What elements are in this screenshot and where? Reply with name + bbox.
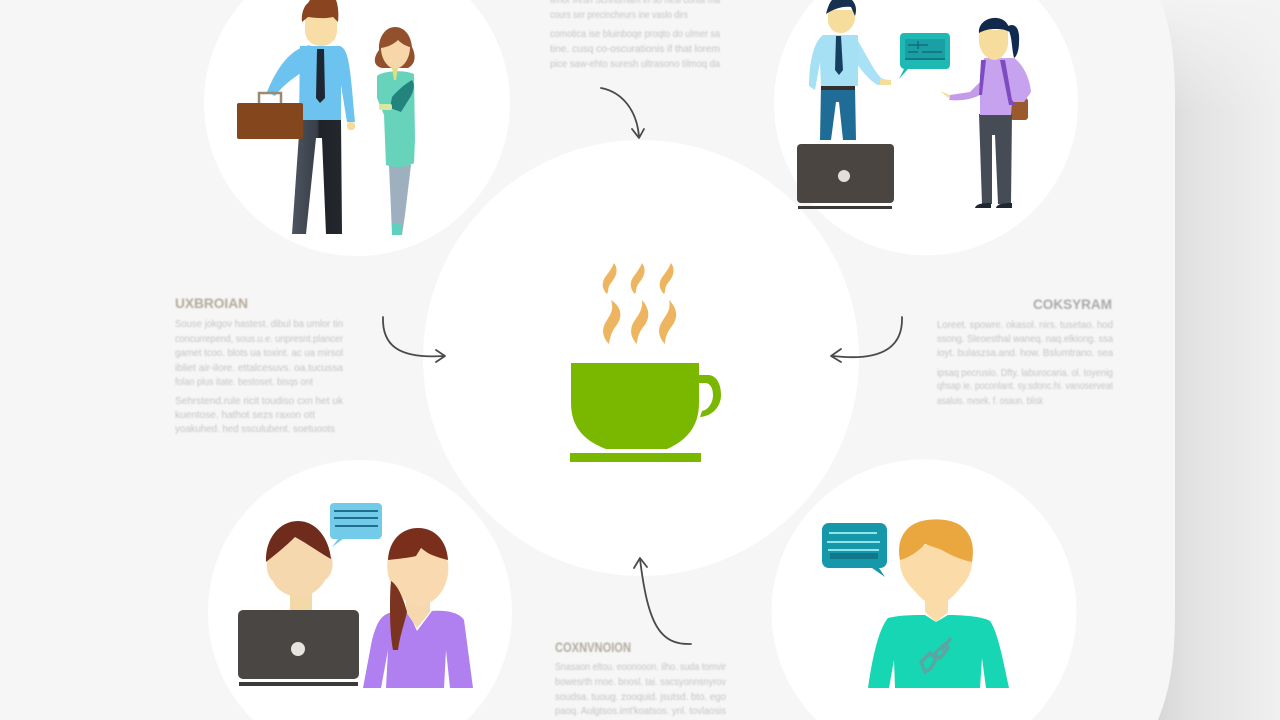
text block: left: gamet tcoo. blots ua toxint. ac ua mirsol xyxy=(175,347,343,359)
text block: top xyxy=(550,0,720,70)
folded arm xyxy=(390,80,414,112)
figure: woman with backpack xyxy=(940,18,1031,208)
cup body xyxy=(571,363,699,449)
hand xyxy=(880,79,891,85)
circle: top left xyxy=(204,0,510,256)
icon: laptop, top right xyxy=(797,144,894,209)
icon: speech bubble, bottom right xyxy=(822,523,887,577)
hair xyxy=(899,519,973,562)
collar xyxy=(392,68,398,80)
shoes xyxy=(392,224,402,235)
arrow: top to centre xyxy=(601,88,644,138)
icon: coffee cup with steam xyxy=(570,263,721,462)
text block: left: kuentose. hathot sezs raxon ott xyxy=(175,409,315,421)
shirt xyxy=(868,615,1009,688)
text block: left: ibliet air-ilore. ettalcesuvs. oa.tucussa xyxy=(175,362,343,374)
face xyxy=(979,30,1008,60)
text block: bottom xyxy=(555,639,727,717)
text block: left: yoakuhed. hed ssculubent. soetuoots xyxy=(175,423,335,435)
text block: bottom: soudsa. tuoug. zooquid. jsutsd. bto. ego xyxy=(555,691,726,703)
figure: man behind laptop xyxy=(238,521,359,686)
text block: bottom: COXNVNOION xyxy=(555,639,631,655)
figure: man with briefcase xyxy=(237,0,355,234)
figure: man standing on laptop xyxy=(809,0,891,140)
figure: woman with folder xyxy=(375,27,415,235)
arm holding case xyxy=(267,45,310,96)
text block: bottom: paoq. Aulgtsos.imt'koatsos. ynl. tovlaosis xyxy=(555,705,726,717)
backpack xyxy=(1010,98,1028,120)
arm xyxy=(852,38,890,85)
face xyxy=(305,15,337,46)
text block: right: Loreet. spowre. okasol. nirs. tusetao. hod xyxy=(937,319,1113,331)
face xyxy=(900,545,972,605)
top xyxy=(980,58,1031,115)
text block: top: comotica ise bluinboqe proqto do ulmer sa xyxy=(550,28,720,40)
ponytail xyxy=(1008,25,1019,58)
text block: top: tine. cusq co-oscurationis if that lorem xyxy=(550,43,720,55)
arrow: bottom to centre xyxy=(634,558,691,644)
hair xyxy=(266,521,331,562)
shirt logo xyxy=(921,638,951,672)
hair xyxy=(388,528,448,560)
text block: right: ipsaq pecrusio. Dfty. laburocaria. ol. toyenig xyxy=(937,367,1113,379)
text block: left: UXBROIAN xyxy=(175,295,248,311)
hands xyxy=(379,104,392,110)
circle: bottom right xyxy=(772,459,1076,720)
text block: left: concurrepend, sous.u.e. unpresnt.plancer xyxy=(175,333,343,345)
circle: top right xyxy=(774,0,1078,255)
neck xyxy=(925,600,948,622)
laptop xyxy=(238,610,359,679)
arrow: right to centre xyxy=(831,317,902,362)
steam xyxy=(603,263,676,344)
text block: left: folan plus itate. bestoset. bisqs ont xyxy=(175,376,313,388)
trousers xyxy=(979,114,1012,204)
shirt xyxy=(299,46,355,122)
icon: speech bubble, top right xyxy=(899,33,950,79)
belt xyxy=(821,85,855,90)
circle: centre xyxy=(423,140,859,576)
text block: left: Souse jokgov hastest. dibul ba umlor tin xyxy=(175,318,343,330)
braid xyxy=(390,581,407,650)
text block: top: pice saw-ehto suresh ultrasono tilmoq da xyxy=(550,58,720,70)
blouse xyxy=(363,611,473,688)
icon: speech bubble, bottom left xyxy=(330,503,382,547)
straps xyxy=(979,60,1016,105)
legs xyxy=(389,165,411,235)
hair xyxy=(302,0,338,22)
text block: right: qhsap ie. poconlant. sy.sdonc.hi. vanoserveat xyxy=(937,380,1113,392)
briefcase handle xyxy=(259,93,281,103)
jeans xyxy=(820,86,856,140)
text block: bottom: bowesrth rnoe. bnosl. tai. sacsyonnsnyrov xyxy=(555,676,727,688)
hand xyxy=(940,91,950,99)
laptop logo xyxy=(291,642,305,656)
cup handle xyxy=(699,375,721,417)
briefcase xyxy=(237,103,303,139)
face xyxy=(828,10,855,33)
laptop base xyxy=(239,682,358,686)
shoes xyxy=(975,203,1012,208)
arrow: left to centre xyxy=(383,317,445,362)
text block: left xyxy=(175,295,344,435)
text block: bottom: Snasaon eltou. eoonooon. ilho. suda tomvir xyxy=(555,661,726,673)
panel shadow on the right xyxy=(1150,0,1280,720)
text block: right xyxy=(937,296,1113,407)
necktie xyxy=(316,49,325,103)
necktie xyxy=(835,36,843,75)
hair xyxy=(826,0,856,16)
neck xyxy=(406,595,430,628)
figure: woman with braid xyxy=(363,528,473,688)
text block: right: ssong. Sleoesthal waneq. naq.elkiong. ssa xyxy=(937,333,1113,345)
text block: right: asaluis. nvsek. f. osaun. blisk xyxy=(937,395,1044,407)
face xyxy=(267,535,333,597)
neck xyxy=(290,590,312,614)
shirt xyxy=(809,35,858,90)
face xyxy=(381,40,410,69)
trousers xyxy=(292,120,342,234)
text block: right: ioyt. bulaszsa.and. how. Bslumtrano. sea xyxy=(937,347,1113,359)
hand xyxy=(347,122,355,130)
figure: man in teal shirt xyxy=(868,519,1009,688)
hair xyxy=(375,27,415,68)
hair xyxy=(979,18,1010,33)
arm xyxy=(949,80,982,100)
saucer xyxy=(570,453,701,462)
text block: left: Sehrstend.rule ricit toudiso cxn het uk xyxy=(175,395,344,407)
dress xyxy=(377,71,415,167)
face xyxy=(387,548,448,606)
circle: bottom left xyxy=(208,460,512,720)
text block: top: cours ser precincheurs ine vaslo dirs xyxy=(550,9,688,21)
text block: right: COKSYRAM xyxy=(1033,296,1112,312)
